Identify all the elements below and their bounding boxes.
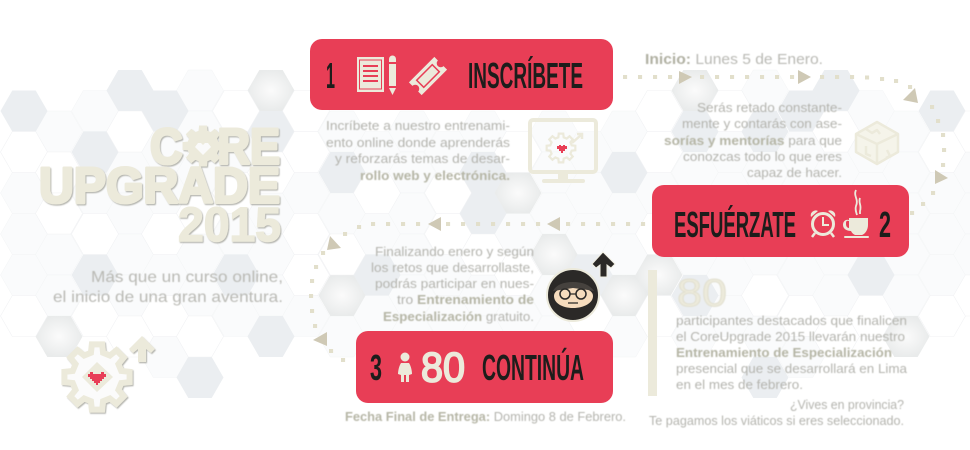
text block: step 1 description: y reforzarás temas de desar- <box>335 151 510 166</box>
text block: province note: Te pagamos los viáticos si eres seleccionado. <box>649 413 904 428</box>
text block: participants: presencial que se desarrollará en Lima <box>676 361 908 376</box>
text: start date: Inicio: Lunes 5 de Enero. <box>645 51 823 68</box>
text block: step 2 description <box>664 100 843 180</box>
panel: step 2 Esfuérzate <box>652 185 909 257</box>
text block: step 3 description: Especialización gratuito. <box>383 309 534 324</box>
text block: step 1 description: Incríbete a nuestro entrenami- <box>326 118 510 133</box>
text block: province note: ¿Vives en provincia? <box>790 397 904 412</box>
icon: monitor with gear <box>530 120 596 183</box>
text block: step 1 description: rollo web y electrónica. <box>360 168 510 183</box>
icon: person <box>398 352 412 382</box>
text block: step 1 description: ento online donde aprenderás <box>326 135 511 150</box>
text block: step 2 description: capaz de hacer. <box>747 165 842 180</box>
route arrowheads 2 to 3 <box>313 217 560 346</box>
step number 2: 2 <box>879 204 891 245</box>
accent bar <box>648 270 657 396</box>
text block: participants <box>676 313 908 392</box>
title: Core Upgrade 2015 <box>39 118 281 252</box>
figure: 80 participants: 80 <box>677 272 727 315</box>
title: Core Upgrade 2015: UPGRADE <box>39 158 280 214</box>
text block: participants: en el mes de febrero. <box>676 377 803 392</box>
text block: step 2 description: conozcas todo lo que eres <box>683 149 843 164</box>
title: Core Upgrade 2015: 2015 <box>178 199 281 252</box>
text block: participants: el CoreUpgrade 2015 llevarán nuestro <box>676 329 905 344</box>
subtitle: Más que un curso online, <box>91 269 283 286</box>
text block: step 3 description: tro Entrenamiento de <box>397 292 534 307</box>
icon: gear with heart and arrow <box>64 336 155 410</box>
icon: document and pencil <box>357 56 396 95</box>
subtitle: el inicio de una gran aventura. <box>53 289 283 306</box>
subtitle <box>53 269 283 306</box>
text block: step 3 description: podrás participar en nues- <box>375 276 534 291</box>
panel: step 1 Inscríbete <box>310 39 613 110</box>
route arrowheads 1 to 2 <box>679 70 948 184</box>
heading: INSCRÍBETE <box>468 55 583 96</box>
text block: participants: Entrenamiento de Especialización <box>676 345 892 360</box>
dotted route 1 to 2 <box>625 77 944 213</box>
text block: step 2 description: mente y contarás con ase- <box>682 116 842 131</box>
hexagon background pattern <box>0 70 970 398</box>
icon: cube <box>856 122 898 164</box>
icon: alarm clock <box>811 210 835 237</box>
text block: participants: participantes destacados que finalicen <box>676 313 907 328</box>
icon: avatar with glasses <box>547 269 599 321</box>
heading: ESFUÉRZATE <box>674 204 796 245</box>
dotted route 2 to 3 <box>311 224 643 360</box>
text block: step 1 description <box>326 118 511 183</box>
text block: step 2 description: sorías y mentorías para que <box>664 133 842 148</box>
title: Core Upgrade 2015: CORE <box>150 118 280 174</box>
figure 80: 80 <box>421 344 465 390</box>
panel: step 1 Inscríbete: 1 <box>326 55 335 96</box>
icon: arrow up <box>592 252 615 277</box>
text block: step 3 description <box>371 244 534 324</box>
text block: step 3 description: los retos que desarrollaste, <box>371 260 534 275</box>
panel: step 3 Continúa <box>356 331 613 403</box>
text block: step 3 description: Finalizando enero y según <box>375 244 534 259</box>
icon: coffee cup with steam <box>843 190 869 238</box>
text block: step 2 description: Serás retado constante- <box>697 100 842 115</box>
icon: ticket <box>409 57 447 95</box>
step number 3: 3 <box>370 347 382 388</box>
text block: province note <box>649 397 904 428</box>
text: final date: Fecha Final de Entrega: Domingo 8 de Febrero. <box>345 409 626 424</box>
heading: CONTINÚA <box>482 346 584 388</box>
icon: gear letter O <box>183 126 223 166</box>
